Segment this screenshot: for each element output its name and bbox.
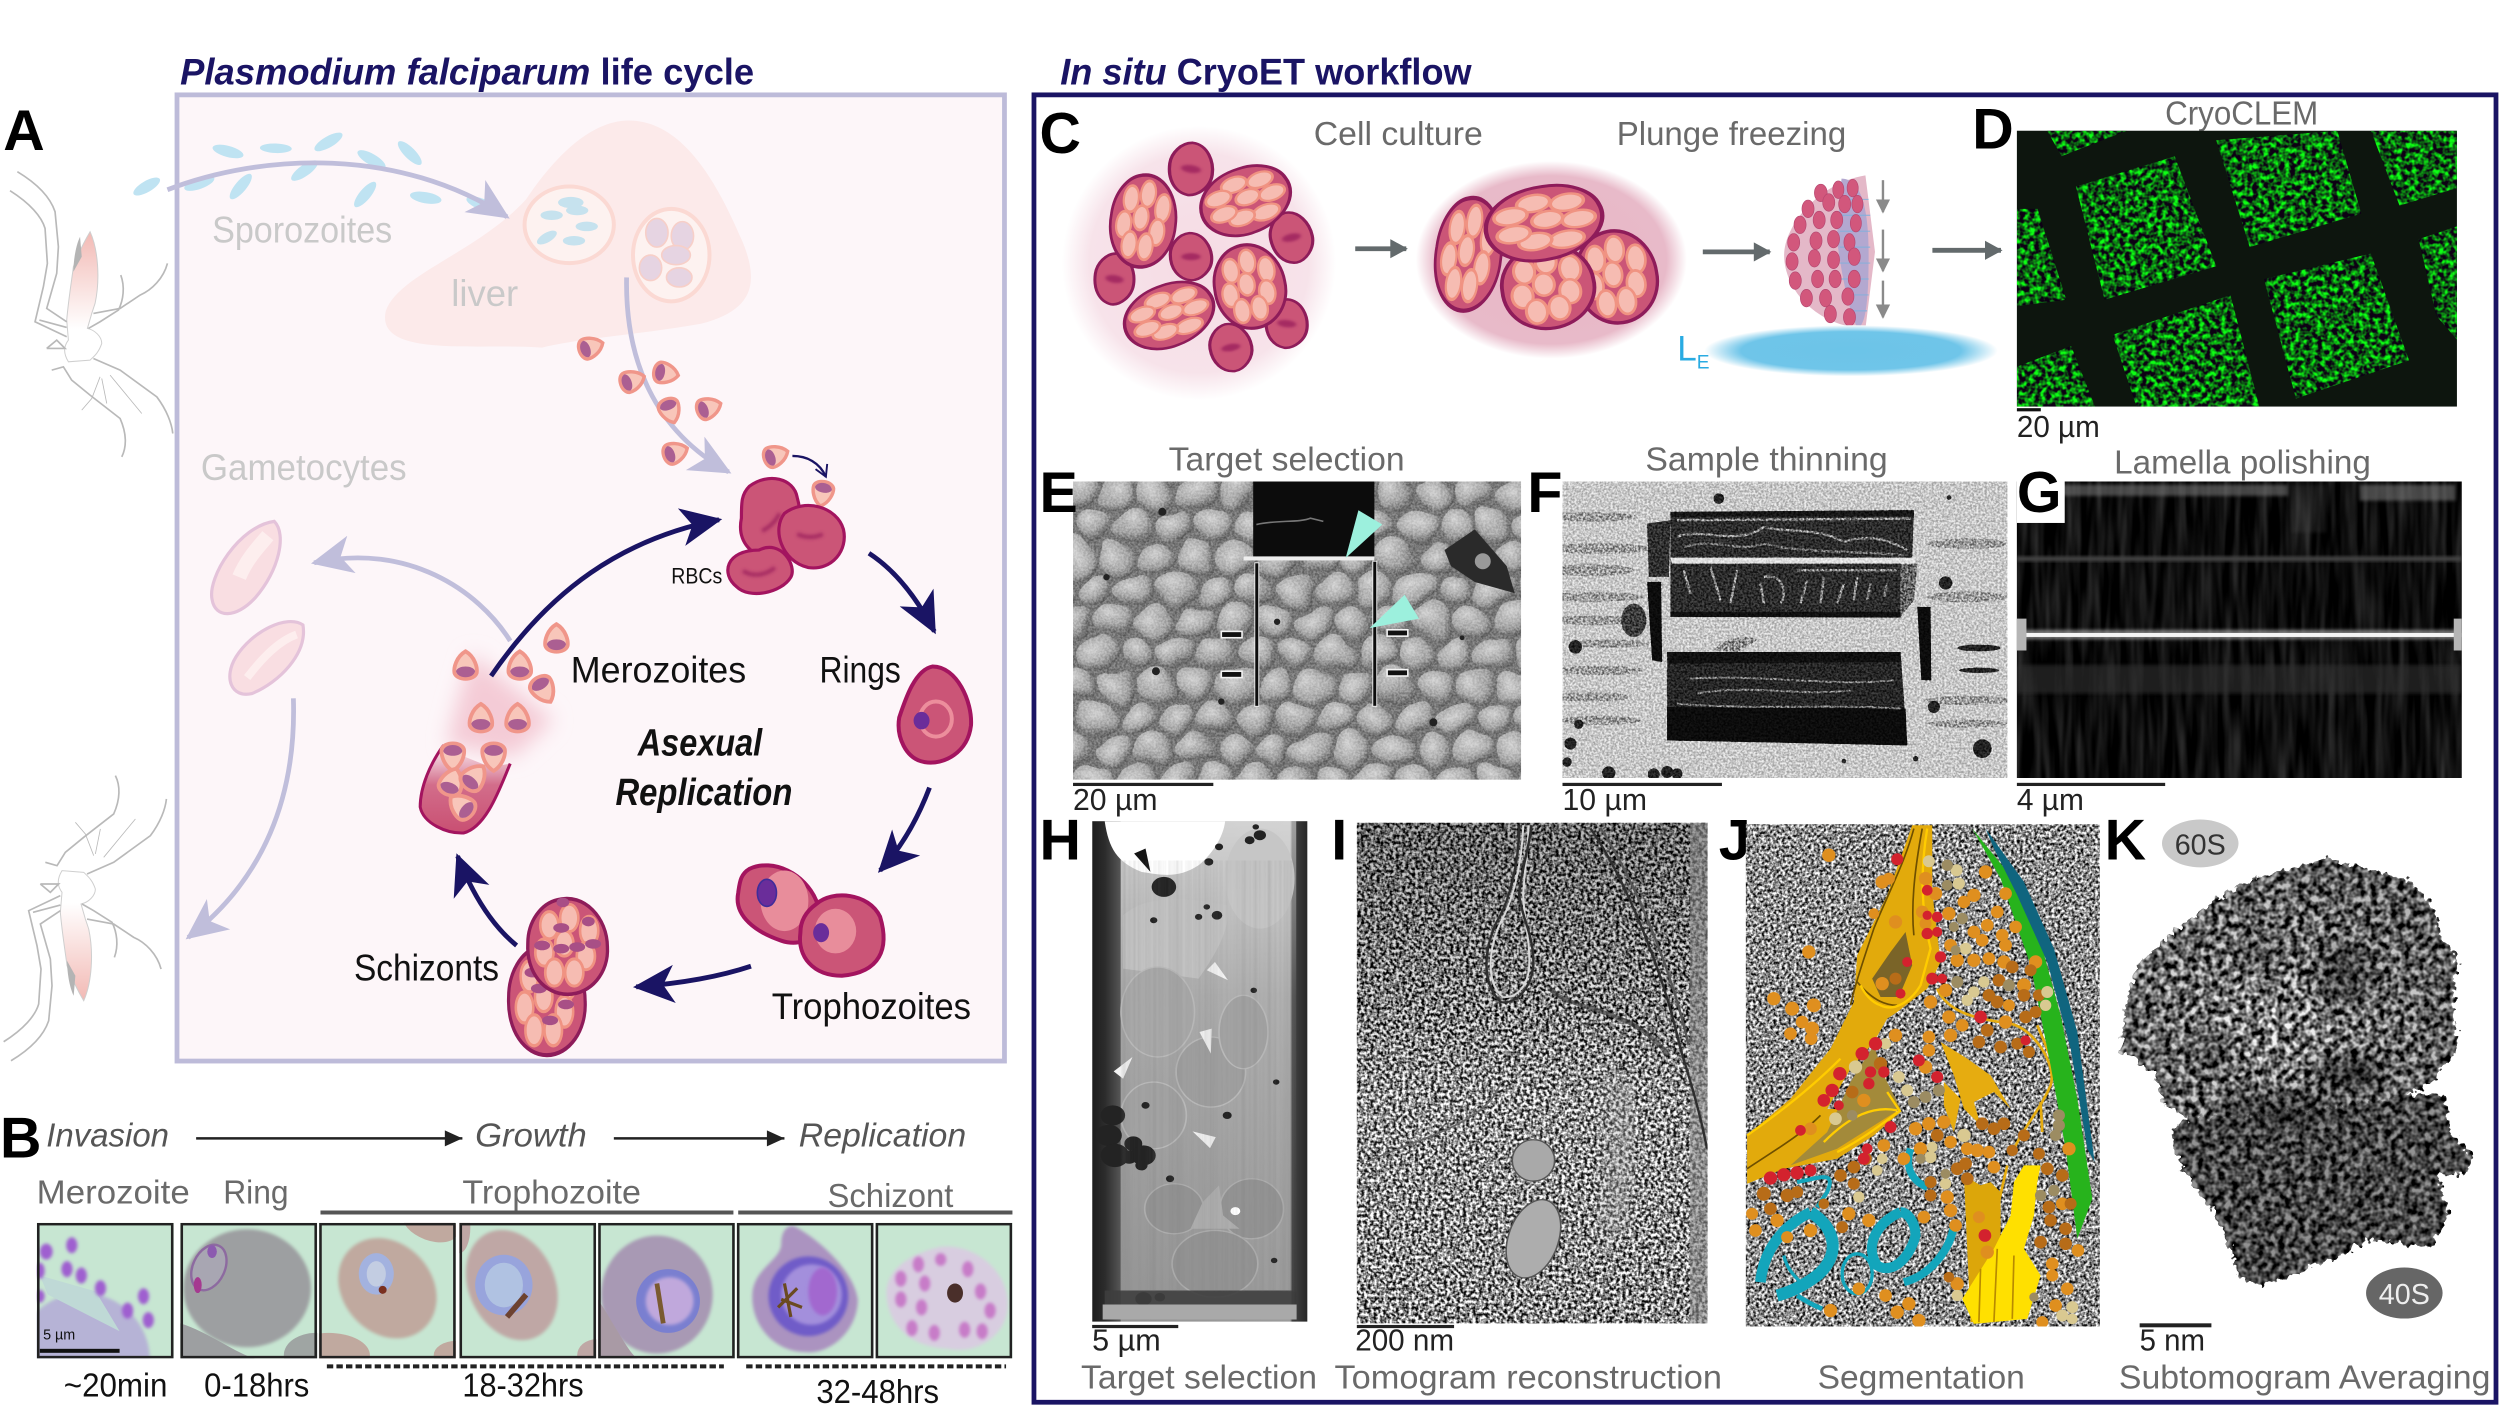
timing labels: ~20min (64, 1368, 167, 1405)
icon: bursting schizont (420, 654, 554, 833)
panel letter A: A (3, 99, 45, 163)
arrow: schizonts to merozoites (458, 856, 517, 945)
panel A: life cycle (3, 95, 1004, 1061)
panel A frame (177, 95, 1004, 1061)
icon: ring stage (899, 666, 971, 763)
label: plunge freezing: Plunge freezing (1617, 116, 1846, 153)
arrow: gametocytes to mosquito (188, 698, 294, 937)
scale bar: 5 µm H: 5 µm (1092, 1324, 1161, 1357)
micrograph: FIB milled trench (1544, 481, 2011, 780)
arrow: liver to RBCs (627, 277, 729, 472)
panel K: subtomogram averaging (2105, 808, 2490, 1397)
label: asexual replication: Asexual (637, 722, 763, 765)
timing labels: 18-32hrs (462, 1368, 584, 1405)
icons: plunge arrows (1882, 180, 1884, 317)
panel F: sample thinning (1527, 441, 2011, 817)
icons: released merozoites (576, 333, 835, 508)
icon: red blood cells (728, 478, 844, 594)
label: asexual replication (615, 722, 792, 814)
label: CryoCLEM: CryoCLEM (2165, 95, 2318, 132)
icons: merozoites in burst (436, 624, 568, 823)
panel D: CryoCLEM (1972, 95, 2457, 444)
arrow: to gametocytes (314, 558, 510, 641)
label: subtomogram averaging: Subtomogram Averaging (2119, 1360, 2490, 1397)
micrograph: polished lamella (2016, 482, 2462, 778)
ribbon: actin bundle main (1747, 825, 1941, 1184)
stage headings: Ring (223, 1175, 289, 1212)
membrane: green and blue (1972, 829, 2092, 1239)
arrow: trophozoites to schizonts (636, 966, 751, 987)
panel letter D: D (1972, 97, 2014, 161)
panel J: segmentation (1719, 808, 2100, 1397)
label: rings: Rings (820, 649, 901, 690)
panel letter E: E (1040, 461, 1078, 525)
label: asexual replication: Replication (615, 771, 792, 814)
scale bar: 5 nm: 5 nm (2140, 1324, 2205, 1357)
stage headings: Schizont (827, 1178, 954, 1215)
timeline: invasion growth replication: Invasion (46, 1117, 169, 1154)
icon: schizonts (509, 898, 608, 1055)
label: target selection bottom: Target selection (1081, 1360, 1317, 1397)
stage headings: Merozoite (37, 1175, 190, 1212)
arrow: grid to plunge (1703, 250, 1770, 253)
illustration: plunge freezing grid (1784, 175, 1875, 328)
label: liver: liver (451, 273, 518, 314)
panel I: tomogram (1331, 808, 1722, 1397)
micrograph: fluorescence grid (2017, 131, 2457, 407)
timing labels (64, 1366, 1006, 1411)
micrograph: tomogram slice (1356, 822, 1708, 1324)
scale bar: 20 µm: 20 µm (2017, 411, 2100, 444)
particles: ribosomes (1746, 849, 2084, 1328)
micrograph: schizont mature (876, 1222, 1012, 1358)
micrograph: SEM cell monolayer (1073, 482, 1522, 780)
panel letter J: J (1719, 808, 1751, 872)
timing labels: 0-18hrs (204, 1368, 309, 1405)
panel C: cell culture and plunge freezing (1040, 102, 2001, 400)
title: workflow: In situ CryoET workflow (1060, 52, 1472, 93)
panel letter I: I (1331, 808, 1347, 872)
panel letter G: G (2017, 461, 2062, 525)
panel letter H: H (1040, 808, 1081, 872)
panel H: lamella overview (1040, 808, 1317, 1397)
timeline: invasion growth replication: Replication (799, 1117, 966, 1154)
label: tomogram reconstruction: Tomogram reconstruction (1335, 1360, 1722, 1397)
icon: gametocytes (212, 521, 303, 694)
label: sporozoites: Sporozoites (212, 209, 392, 250)
timeline: invasion growth replication (46, 1117, 966, 1154)
micrograph: merozoite (36, 1222, 174, 1358)
label: lamella polishing: Lamella polishing (2114, 445, 2371, 482)
micrograph: schizont early (736, 1222, 874, 1358)
arrow: plunge to CLEM (1932, 249, 2001, 252)
icons: sporozoites (131, 129, 498, 215)
arrow: merozoites to RBCs (491, 520, 719, 676)
illustration: mosquito biting top (10, 172, 173, 457)
icon: infected hepatocytes (525, 187, 710, 301)
panel B: blood smear stages (0, 1107, 1012, 1415)
micrograph: trophozoite mid (459, 1222, 596, 1358)
title: life cycle: Plasmodium falciparum life cycle (180, 52, 754, 93)
scale bar: 20 µm E: 20 µm (1073, 784, 1158, 817)
scale bar: 4 µm (2017, 783, 2165, 817)
micrograph: lamella TEM overview (1092, 821, 1307, 1322)
label: RBCs: RBCs (671, 564, 722, 589)
panel G: lamella polishing (2017, 445, 2462, 817)
label: cell culture: Cell culture (1314, 116, 1483, 153)
micrograph: merozoite: 5 µm (43, 1327, 75, 1343)
illustration: cell culture droplet (1062, 126, 1336, 400)
label: schizonts: Schizonts (354, 948, 499, 989)
label: target selection: Target selection (1169, 441, 1405, 478)
illustration: cells on grid (1416, 161, 1687, 359)
arrow: rings to trophozoites (880, 788, 930, 871)
panel E: target selection (1040, 441, 1537, 817)
arrow: culture to grid (1355, 247, 1406, 250)
panel letter K: K (2105, 808, 2146, 872)
badge: 40S (2366, 1268, 2443, 1319)
label: gametocytes: Gametocytes (201, 447, 407, 488)
arrow: invasion small (792, 456, 826, 477)
membrane: teal vesicles (1760, 1149, 1954, 1309)
micrograph: segmentation overlay (1746, 824, 2100, 1328)
panel: CryoET workflow frame (1034, 95, 2496, 1402)
icon: trophozoites (738, 865, 884, 976)
map: 40S subunit (2171, 1094, 2474, 1287)
panel letter C: C (1040, 102, 1081, 166)
timing labels: 32-48hrs (816, 1374, 939, 1411)
label: liquid ethane LE: E (1697, 352, 1710, 373)
micrograph: ring (180, 1222, 318, 1358)
panel letter B: B (0, 1107, 41, 1171)
scale bar: 10 µm (1562, 783, 1722, 817)
badge: 60S: 60S (2175, 830, 2226, 862)
scale bar: 20 µm E (1073, 783, 1213, 817)
timeline: invasion growth replication: Growth (475, 1117, 587, 1154)
panel letter F: F (1527, 461, 1562, 525)
micrograph: trophozoite early (318, 1222, 456, 1358)
stage headings (37, 1175, 1012, 1215)
label: merozoites: Merozoites (571, 649, 746, 690)
badge: 40S: 40S (2379, 1279, 2430, 1311)
micrograph: trophozoite late (598, 1222, 735, 1358)
illustration: mosquito biting bottom (4, 776, 166, 1061)
map: 60S subunit (2120, 859, 2457, 1120)
stage headings: Trophozoite (462, 1175, 641, 1212)
label: sample thinning: Sample thinning (1645, 441, 1888, 478)
arrow: sporozoites to liver (167, 163, 507, 217)
scale bar: 200 nm: 200 nm (1355, 1324, 1454, 1357)
illustration: liquid ethane (1704, 325, 1998, 376)
badge: 60S (2162, 820, 2239, 867)
scale bar: 4 µm: 4 µm (2017, 784, 2084, 817)
shape: liver (385, 120, 751, 348)
scale bar: 10 µm: 10 µm (1562, 784, 1647, 817)
label: liquid ethane LE: L (1677, 329, 1697, 368)
arrow: RBCs to rings (869, 553, 934, 631)
label: segmentation: Segmentation (1818, 1360, 2025, 1397)
label: trophozoites: Trophozoites (772, 986, 971, 1027)
